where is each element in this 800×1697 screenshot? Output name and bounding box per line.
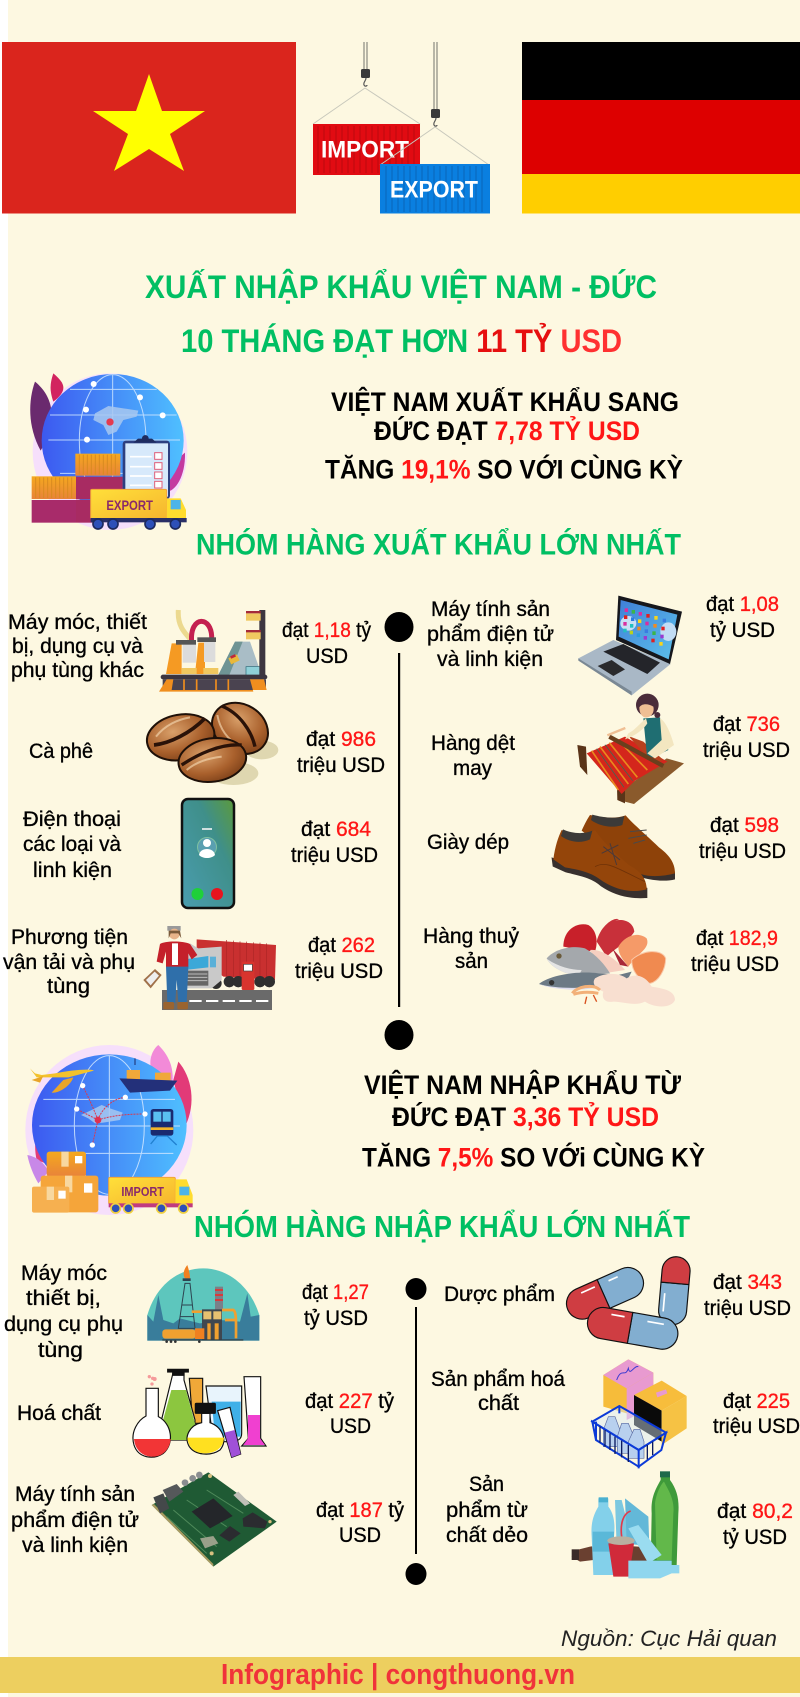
timeline: exports (384, 612, 414, 1050)
icon: export globe illustration (30, 373, 187, 530)
item: plastics label: chất dẻo (446, 1523, 528, 1547)
item: computers import label (11, 1482, 139, 1557)
item: computers import value: đạt 187 tỷ (316, 1498, 404, 1522)
flag: Vietnam (2, 42, 296, 214)
title line 2: 10 THÁNG ĐẠT HƠN 11 TỶ USD (181, 323, 622, 359)
item: coffee value (297, 727, 385, 777)
icon: chemical products boxes (592, 1359, 687, 1468)
item: chemical products label (431, 1367, 565, 1415)
item: seafood label (423, 924, 519, 973)
item: computers label: Máy tính sản (431, 597, 550, 621)
item: phones value: đạt 684 (301, 817, 371, 841)
item: textiles label: Hàng dệt (431, 731, 515, 755)
import summary text: ĐỨC ĐẠT 3,36 TỶ USD (392, 1100, 659, 1132)
icon: import export containers: EXPORT (390, 176, 478, 204)
item: machinery value: USD (306, 644, 348, 668)
item: computers label: và linh kiện (437, 647, 543, 671)
icon: factory (159, 610, 267, 692)
item: seafood value: đạt 182,9 (696, 926, 778, 950)
item: seafood label: sản (455, 949, 488, 973)
icon: coffee beans (143, 692, 278, 786)
item: chemical products value: đạt 225 (723, 1389, 790, 1413)
icon: circuit board (152, 1472, 277, 1567)
item: textiles label: may (453, 756, 492, 780)
item: machinery label: bị, dụng cụ và (12, 634, 143, 658)
item: computers value: tỷ USD (710, 618, 775, 642)
import summary text: TĂNG 7,5% SO VỚi CÙNG KỲ (362, 1142, 705, 1172)
icon: lab flasks (133, 1369, 266, 1457)
item: chemicals label: Hoá chất (17, 1401, 101, 1425)
item: machinery label: Máy móc, thiết (8, 610, 147, 634)
item: textiles value: đạt 736 (713, 712, 780, 736)
icon: capsules (561, 1256, 691, 1352)
icon: shoes (552, 815, 675, 898)
item: plastics value (717, 1499, 793, 1549)
item: machinery import value (302, 1280, 369, 1330)
item: vehicles value (295, 933, 383, 983)
icon: seafood (539, 919, 675, 1006)
footer banner: Infographic | congthuong.vn (221, 1659, 575, 1691)
item: machinery label (8, 610, 147, 682)
item: computers import value: USD (339, 1523, 381, 1547)
item: machinery import label: dụng cụ phụ (4, 1312, 123, 1336)
heading: top import groups: NHÓM HÀNG NHẬP KHẨU LỚN NHẤT (194, 1208, 690, 1244)
item: pharmaceuticals value (704, 1270, 791, 1320)
item: vehicles label (3, 925, 135, 998)
item: chemicals value: đạt 227 tỷ (305, 1389, 394, 1413)
item: plastics value: đạt 80,2 (717, 1499, 793, 1523)
import summary text: VIỆT NAM NHẬP KHẨU TỪ (364, 1069, 682, 1100)
item: pharmaceuticals label: Dược phẩm (444, 1282, 555, 1306)
item: seafood value: triệu USD (691, 952, 779, 976)
item: machinery label: phụ tùng khác (11, 658, 144, 682)
icon: refinery (147, 1265, 259, 1343)
item: phones value: triệu USD (291, 843, 378, 867)
icon: phone (182, 799, 234, 908)
item: vehicles value: triệu USD (295, 959, 383, 983)
item: machinery import label: Máy móc (21, 1261, 107, 1285)
item: chemical products label: Sản phẩm hoá (431, 1367, 565, 1391)
icon: truck and worker (143, 926, 276, 1010)
item: coffee label: Cà phê (29, 739, 93, 763)
item: footwear label: Giày dép (427, 830, 509, 854)
item: computers label (427, 597, 554, 671)
icon: import export containers (313, 42, 490, 214)
item: machinery value (282, 618, 371, 668)
item: computers import label: và linh kiện (22, 1533, 128, 1557)
item: computers import value (316, 1498, 404, 1547)
icon: import globe illustration (25, 1045, 193, 1215)
item: footwear value (699, 813, 786, 863)
item: phones label: linh kiện (33, 858, 112, 882)
item: chemicals value: USD (330, 1414, 371, 1438)
export summary text (325, 386, 683, 484)
item: textiles label (431, 731, 515, 780)
item: machinery import value: tỷ USD (304, 1306, 368, 1330)
item: computers label: phẩm điện tử (427, 622, 554, 646)
item: phones value (291, 817, 378, 867)
item: vehicles value: đạt 262 (308, 933, 375, 957)
icon: laptop (578, 596, 682, 695)
flag: Germany (522, 42, 800, 214)
icon: weaver (577, 694, 684, 804)
item: vehicles label: vận tải và phụ (3, 950, 135, 974)
item: textiles value: triệu USD (703, 738, 790, 762)
item: pharmaceuticals value: đạt 343 (713, 1270, 782, 1294)
item: computers import label: phẩm điện tử (11, 1508, 139, 1532)
icon: export globe illustration: EXPORT (106, 497, 153, 513)
item: phones label: Điện thoại (23, 807, 121, 831)
item: machinery value: đạt 1,18 tỷ (282, 618, 371, 642)
item: machinery import label: tùng (38, 1338, 83, 1362)
item: machinery import label: thiết bị, (26, 1286, 101, 1310)
item: chemical products label: chất (478, 1391, 519, 1415)
item: plastics label: phẩm từ (446, 1498, 528, 1522)
heading: top export groups: NHÓM HÀNG XUẤT KHẨU LỚN NHẤT (196, 528, 681, 562)
item: coffee value: triệu USD (297, 753, 385, 777)
item: vehicles label: tùng (47, 974, 90, 998)
icon: plastic bottles (572, 1471, 679, 1578)
import summary text (362, 1069, 705, 1172)
item: phones label: các loại và (23, 832, 121, 856)
title line 1: XUẤT NHẬP KHẨU VIỆT NAM - ĐỨC (145, 269, 657, 305)
export summary text: VIỆT NAM XUẤT KHẨU SANG (331, 386, 679, 417)
item: pharmaceuticals value: triệu USD (704, 1296, 791, 1320)
footer banner (0, 1657, 800, 1693)
item: computers value (706, 592, 779, 642)
item: chemicals value (305, 1389, 394, 1438)
item: seafood value (691, 926, 779, 976)
item: chemical products value (713, 1389, 800, 1438)
item: footwear value: triệu USD (699, 839, 786, 863)
item: plastics label: Sản (469, 1472, 504, 1496)
icon: import export containers: IMPORT (321, 136, 409, 164)
timeline: imports (406, 1278, 426, 1585)
item: seafood label: Hàng thuỷ (423, 924, 519, 948)
item: machinery import value: đạt 1,27 (302, 1280, 369, 1304)
item: machinery import label (4, 1261, 123, 1362)
item: computers value: đạt 1,08 (706, 592, 779, 616)
item: plastics label (446, 1472, 528, 1547)
source note: Nguồn: Cục Hải quan (561, 1626, 777, 1651)
item: computers import label: Máy tính sản (15, 1482, 135, 1506)
item: vehicles label: Phương tiện (11, 925, 128, 949)
icon: import globe illustration: IMPORT (121, 1185, 164, 1199)
export summary text: TĂNG 19,1% SO VỚI CÙNG KỲ (325, 454, 683, 484)
item: textiles value (703, 712, 790, 762)
item: phones label (23, 807, 121, 882)
item: footwear value: đạt 598 (710, 813, 779, 837)
item: coffee value: đạt 986 (306, 727, 376, 751)
item: plastics value: tỷ USD (723, 1525, 787, 1549)
export summary text: ĐỨC ĐẠT 7,78 TỶ USD (374, 414, 640, 446)
